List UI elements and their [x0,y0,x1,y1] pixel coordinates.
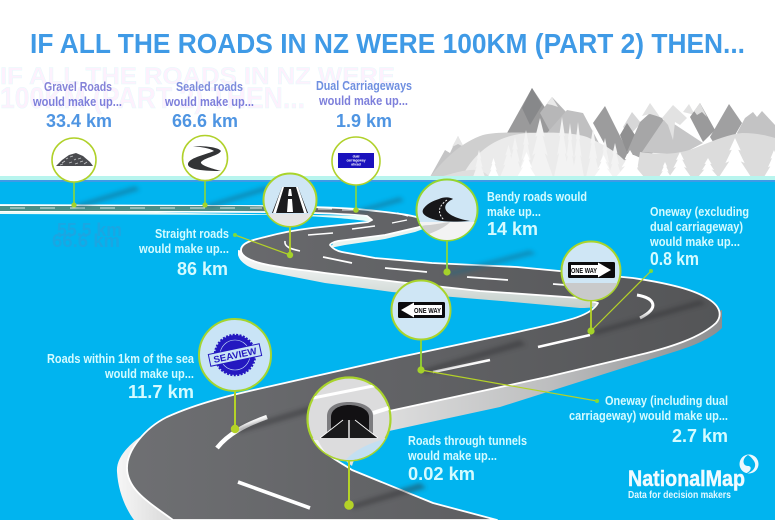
label: oneway excluding dual carriageway: would make up... [649,235,740,249]
icon: tunnel [312,384,389,460]
label: roads within 1km of the sea: would make up... [104,367,194,381]
pin shadows [74,186,706,509]
label: oneway including dual carriageway [569,394,728,446]
horizon band [0,176,775,180]
callout: oneway excluding dual carriageway [591,271,651,331]
label: roads through tunnels [407,434,527,484]
label: dual carriageways [316,79,412,131]
callout lines [235,235,651,401]
label: gravel roads: Gravel Roads [44,80,112,94]
label: oneway including dual carriageway: carriageway) would make up... [569,409,728,423]
pin: tunnels [306,378,395,510]
lane markings [10,208,653,508]
road surface [0,205,720,520]
faint ghost text on the sea: 55.5 km [57,220,122,240]
faint ghost text on the sea: 66.6 km [52,231,120,251]
label: straight roads [138,227,229,279]
icon: dual carriageway sign: carriageway [346,158,366,162]
pin: oneway right [560,242,622,335]
pin: straight roads [263,174,317,258]
background: sea [0,180,775,520]
label: straight roads: Straight roads [155,227,229,241]
icon: dual carriageway sign: dual [353,154,359,158]
faint ghost text behind the labels: 100KM (PART 2) THEN... [0,82,305,115]
label: sealed roads: 66.6 km [172,110,238,131]
icon: bendy road [420,197,474,240]
label: roads through tunnels: 0.02 km [408,463,475,484]
logo: NationalMap: Data for decision makers [628,489,731,501]
label: dual carriageways: 1.9 km [336,110,392,131]
callout end dots [233,233,653,403]
icon: straight road [268,187,312,226]
label: oneway excluding dual carriageway: 0.8 km [650,248,699,269]
pin: sealed roads [182,136,228,208]
label: sealed roads: would make up... [164,95,254,109]
faint ghost text behind the labels [0,63,395,115]
callout: straight roads [235,235,290,255]
label: oneway excluding dual carriageway: dual carriageway) [650,220,743,234]
logo: NationalMap: NationalMap [628,466,745,491]
label: bendy roads: 14 km [487,218,538,239]
label: sealed roads: Sealed roads [176,80,243,94]
road [0,186,722,520]
label: dual carriageways: Dual Carriageways [316,79,412,93]
pin: dual carriageways [332,137,380,213]
label: gravel roads: 33.4 km [46,110,112,131]
icon: dual carriageway sign [338,153,374,168]
icon: winding road [188,146,221,171]
label: roads through tunnels: Roads through tunnels [408,434,527,448]
pin: bendy roads [416,180,478,276]
label: roads within 1km of the sea: 11.7 km [128,381,194,402]
faint ghost text behind the labels: IF ALL THE ROADS IN NZ WERE [0,63,395,90]
label: sealed roads [164,80,254,131]
label: oneway including dual carriageway: 2.7 km [672,425,728,446]
label: oneway including dual carriageway: Oneway (including dual [605,394,728,408]
mountains illustration [430,88,775,177]
label: roads within 1km of the sea: Roads within 1km of the sea [47,352,195,366]
road side walls [0,210,722,520]
callout: oneway including dual carriageway [421,370,597,401]
label: straight roads: 86 km [177,258,228,279]
title: IF ALL THE ROADS IN NZ WERE 100KM (PART 2) THEN... [30,28,745,59]
icon: one way sign pointing right: ONE WAY [571,266,597,275]
label: oneway excluding dual carriageway: Oneway (excluding [650,205,749,219]
pin: seaview [199,319,271,433]
label: gravel roads: would make up... [32,95,122,109]
icon: one way sign pointing left: ONE WAY [414,306,441,315]
icon: light pine trees [473,117,622,177]
icon: logo swoosh [740,454,758,474]
label: oneway excluding dual carriageway [649,205,749,269]
icon: gravel pile [56,153,93,166]
label: bendy roads: make up... [487,205,541,219]
label: gravel roads [32,80,122,131]
distant road tint [0,206,300,211]
faint ghost text on the sea [52,220,122,251]
icon: white pine trees [488,138,775,177]
label: straight roads: would make up... [138,242,229,256]
icon: seaview stamp: SEAVIEW [213,346,258,366]
label: dual carriageways: would make up... [318,94,408,108]
label: roads within 1km of the sea [47,352,195,402]
icon: dual carriageway sign: ahead [351,162,361,166]
logo: NationalMap [628,454,758,501]
background: sky [0,0,775,177]
label: bendy roads: Bendy roads would [487,190,587,204]
label: bendy roads [487,190,587,239]
label: roads through tunnels: would make up... [407,449,497,463]
pin: gravel roads [52,138,96,208]
pin: oneway left [392,280,450,374]
